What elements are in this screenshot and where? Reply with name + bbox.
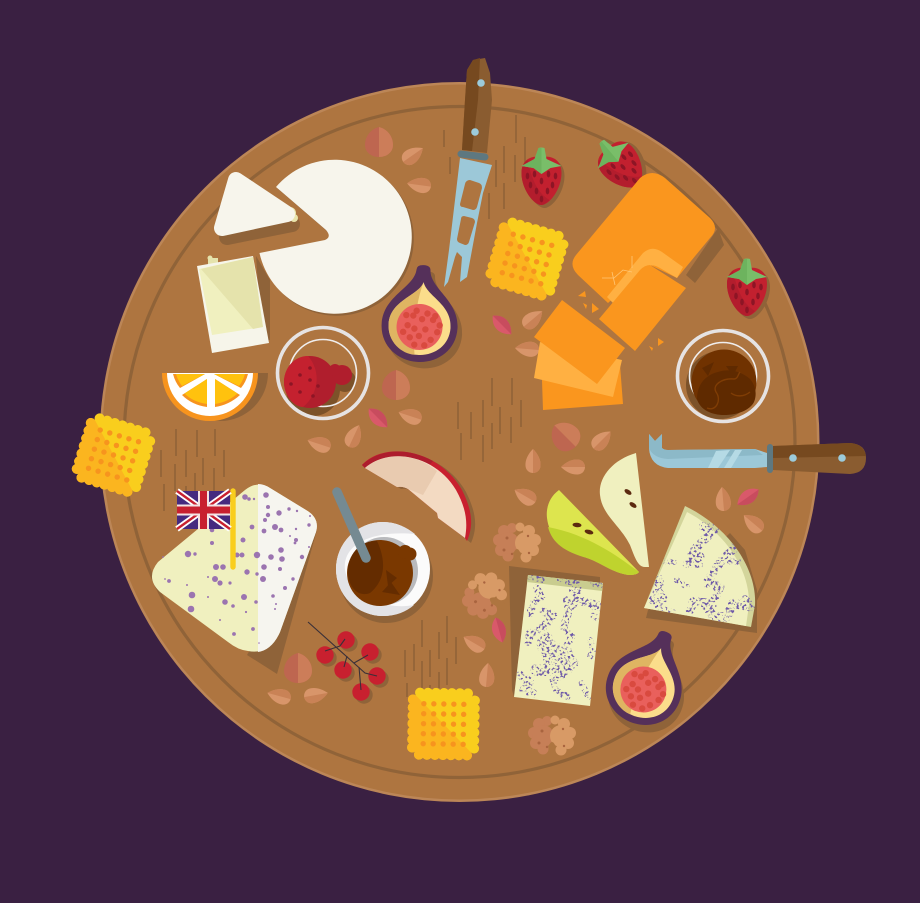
crackers xyxy=(64,210,576,765)
veins xyxy=(520,577,600,697)
shadow xyxy=(247,530,317,674)
handle xyxy=(773,443,866,474)
middle slice xyxy=(534,342,622,397)
cracks xyxy=(602,256,632,285)
blue cheese wedge, right xyxy=(644,506,757,633)
blade xyxy=(649,434,767,468)
cheese body xyxy=(152,484,317,652)
brie wheel xyxy=(260,160,414,316)
cherries on a stem xyxy=(308,622,389,704)
illustration: cheese board xyxy=(72,58,866,802)
block shadow xyxy=(686,228,724,283)
fig, lower xyxy=(593,618,706,744)
bottom slice xyxy=(542,365,623,410)
fig, upper xyxy=(379,262,467,371)
pear slice, green xyxy=(547,490,639,575)
cut wedge xyxy=(599,265,686,351)
wooden board xyxy=(100,82,820,802)
blue cheese rectangle xyxy=(509,566,603,706)
guard xyxy=(461,154,485,157)
veins xyxy=(653,527,750,617)
shadow xyxy=(509,566,600,697)
blade xyxy=(444,158,492,287)
spoon xyxy=(337,492,366,558)
brie wedge xyxy=(222,180,298,237)
crumbs xyxy=(578,291,664,351)
main block xyxy=(572,173,715,303)
walnuts xyxy=(455,522,576,759)
cheese body xyxy=(644,512,749,626)
guard xyxy=(767,447,773,470)
hazelnuts xyxy=(284,127,586,683)
blue cheese wedge with flag xyxy=(152,484,317,674)
flag pick xyxy=(230,491,236,567)
body xyxy=(514,575,603,706)
rind xyxy=(644,506,755,627)
cut face xyxy=(607,249,683,303)
glass of red jam xyxy=(278,328,368,418)
shadow xyxy=(646,533,757,633)
top slice xyxy=(534,300,625,384)
orange slice xyxy=(162,373,268,421)
cheddar block and slices xyxy=(534,173,724,410)
pear slice, pale xyxy=(600,453,649,567)
apple slice xyxy=(362,451,475,543)
nuts and seeds scattered xyxy=(265,127,767,759)
glass of brown sauce xyxy=(678,330,768,422)
grain scratches xyxy=(161,115,525,697)
soft cheese slice xyxy=(197,256,270,353)
pink seeds xyxy=(364,311,763,644)
strawberries xyxy=(522,127,770,319)
rind xyxy=(527,575,603,591)
ramekin of chutney xyxy=(336,492,433,623)
veins xyxy=(162,492,311,644)
union flag xyxy=(177,491,230,529)
cheese knife, top xyxy=(444,58,492,287)
almonds xyxy=(265,142,767,706)
handle xyxy=(462,58,492,153)
cheese knife, right xyxy=(649,434,866,474)
